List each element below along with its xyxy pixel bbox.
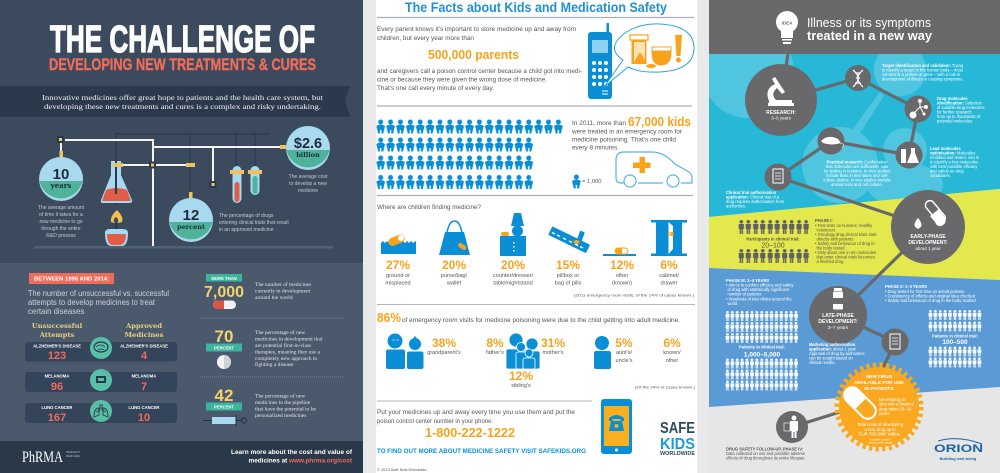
icon: flask <box>101 160 132 203</box>
text: lead molecules: to identify a few molecules <box>930 160 978 164</box>
stat: 10 years: years <box>50 181 71 190</box>
row: melanoma: MELANOMA <box>132 374 156 378</box>
text: 67,000 kids: 67,000 kids <box>628 114 691 129</box>
intro text: cine or because they were given the wrong dose of medicine. <box>377 76 547 84</box>
badge: new drug available: EUR 700–800* million. <box>859 432 901 436</box>
header title <box>807 15 933 43</box>
text: phase I: • Safety and behaviour of drug in <box>815 241 875 246</box>
text: target identification <box>882 63 964 82</box>
stats: parents and siblings: mother's <box>543 350 564 356</box>
icon: mobile phone and speech bubble <box>588 23 694 99</box>
stat: 70 percent: fighting a disease <box>255 361 294 368</box>
text: 67,000 kids: In 2011, more than <box>572 120 626 127</box>
text: phase I: the body tested <box>816 246 845 250</box>
stats: aunts, other: known/ <box>663 350 681 356</box>
icon: ground <box>381 233 416 254</box>
footer call to action: Learn more about the cost and value of <box>231 449 353 456</box>
row: lung cancer <box>25 400 177 424</box>
percentages: places: pillbox or <box>557 273 579 279</box>
text: lead molecules: and safety as drug <box>930 168 964 174</box>
percentages: places: table/nightstand <box>493 280 533 286</box>
stat: 7,000: around the world <box>255 295 293 301</box>
badge: new drug available: drug takes 10–15 <box>879 406 912 412</box>
title: THE CHALLENGE OF <box>50 19 315 61</box>
percentages: places: ground or <box>386 273 410 279</box>
row: alzheimer's <box>25 337 177 362</box>
copyright: © 2013 Safe Kids Worldwide <box>377 467 427 472</box>
stat: 7,000: The number of medicines <box>255 281 311 288</box>
percentages: places <box>385 258 679 286</box>
phase II patients pictogram: 100–500 <box>942 339 968 346</box>
header title: Illness or its symptoms <box>807 15 931 30</box>
icon: counter with lamp <box>500 213 526 256</box>
node: research: 3–5 years <box>771 116 792 120</box>
text: phase I: a finished drug <box>816 259 844 264</box>
column headings: Medicines <box>124 331 164 339</box>
stat: 10 years: R&D process <box>46 233 76 239</box>
text: target identification: commonly a protein or gene – with a role in <box>882 72 961 77</box>
percentages: places: 20% <box>442 258 466 272</box>
badge: new drug available: AVAILABLE FOR USE <box>854 380 904 386</box>
text: practical research: for testing in humans. In vitro studies <box>824 168 890 174</box>
percentages: places: cabinet/ <box>659 273 679 279</box>
text: phase III: • Hundreds of trial clinics around the <box>726 296 792 302</box>
text: phase I <box>815 218 877 264</box>
text: phase II: PHASE II: 1–3 YEARS <box>885 284 927 289</box>
intro text: children, but every year more than <box>377 35 474 42</box>
text: 67,000 kids <box>571 114 691 152</box>
text: marketing authorisation: application: about 1 year <box>809 346 857 352</box>
icon: purse <box>439 221 470 255</box>
icon: family <box>506 333 540 369</box>
text: drug safety follow-up: effects of drug throughout its entire lifespan. <box>726 456 806 460</box>
text: phase III <box>726 278 795 306</box>
node: late-phase development <box>809 286 867 344</box>
text: clinical trial authorisation: application: Clinical trial of a <box>726 194 780 200</box>
text: clinical trial authorisation: authorities. <box>726 204 746 208</box>
row: lung cancer: LUNG CANCER <box>42 405 72 410</box>
text: lead molecules: optimisation: Molecules <box>930 150 975 156</box>
percentages: places: (known) <box>612 280 632 286</box>
node: early-phase development <box>891 190 965 264</box>
logo: safe kids: KIDS <box>660 436 695 453</box>
badge: new drug available: Total costs of developing <box>857 422 904 427</box>
lab pipes diagram <box>57 134 286 247</box>
percentages: places: 12% <box>610 258 634 272</box>
panel: kids and medication safety <box>376 0 697 473</box>
comparison intro text: The number of unsuccessful vs. successful <box>28 289 169 298</box>
stat: 70 percent: completely new approach to <box>255 356 317 362</box>
stats: parents and siblings: 8% <box>486 336 504 350</box>
row: melanoma <box>25 369 177 393</box>
panel: challenge of developing treatments <box>0 0 363 473</box>
footer call to action <box>231 449 353 464</box>
column headings <box>32 322 164 339</box>
phase I participants pictogram: Participants in clinical trial: <box>746 236 800 242</box>
intro text: and caregivers call a poison control center because a child got into medi- <box>377 68 582 75</box>
stat: 2.6 billion <box>286 126 330 194</box>
node: marketing document <box>882 328 908 356</box>
text: drug molecules: Drug molecules <box>937 96 968 101</box>
stat: grandparents <box>427 336 461 356</box>
label: between 1998 and 2014 <box>29 273 114 284</box>
text: marketing authorisation: Approval of drug by authorities <box>809 351 865 356</box>
text: practical research: include tests in test tubes and cell- <box>826 173 889 178</box>
column headings: Unsuccessful <box>32 322 83 330</box>
text: phase II: • Safety and behaviour of drug in the body studied <box>885 298 976 303</box>
stat: 42 percent: that have the potential to be <box>255 406 316 412</box>
text: phase III: of drug with statistically significant <box>728 287 790 292</box>
text: marketing authorisation: can be sought based on <box>809 356 853 360</box>
label: between 1998 and 2014: BETWEEN 1998 AND 2014: <box>34 276 109 282</box>
logo: orion: ORION <box>934 443 983 455</box>
text: phase I: PHASE I: <box>815 218 833 223</box>
text: lead molecules: modified and tested. Aim is <box>930 155 979 160</box>
text: 67,000 kids: every 8 minutes. <box>572 144 619 152</box>
badge: new drug available: years. <box>879 411 890 416</box>
stat: 7,000: 7,000 <box>204 284 244 301</box>
call to action: Put your medicines up and away every time you use them and put the <box>377 409 575 416</box>
row: melanoma: MELANOMA <box>45 374 69 378</box>
stat: 12 percent: The percentage of drugs <box>219 213 274 219</box>
text: clinical trial authorisation <box>726 190 785 208</box>
headline: 86%: 86% <box>377 310 401 325</box>
icon: ambulance van <box>616 152 692 187</box>
text: phase I: • Only about one in ten molecules <box>815 250 876 255</box>
percentages: places: purse/bag/ <box>441 273 468 279</box>
badge: new drug available: *Includes costs of <box>869 438 891 442</box>
stat: 10 years: new medicine to go <box>39 219 83 225</box>
background bands <box>709 0 1000 407</box>
call to action: poison control center number in your phone: <box>377 418 493 425</box>
row: lung cancer: 167 <box>48 412 66 424</box>
stat: 70 percent: therapies, meaning they use a <box>255 349 320 355</box>
percentages: places: drawer <box>660 280 678 286</box>
stat: grandparents: 38% <box>432 336 456 350</box>
icon: aunt or uncle <box>594 336 611 369</box>
stat: 7,000: MORE THAN <box>211 276 237 281</box>
note: (Of the 24% of cases known.) <box>635 384 696 390</box>
text: lead molecules: Lead molecules <box>930 146 961 151</box>
text: phase III: PHASE III: 2–4 YEARS <box>726 278 769 283</box>
text: phase I: • First tests on humans; healthy <box>815 223 873 228</box>
stat: 42 percent <box>203 386 316 426</box>
node: lab flasks <box>896 142 922 168</box>
text: phase I: directly with patients <box>816 236 853 242</box>
headline: 86% <box>377 310 680 325</box>
stat: 70 percent: PERCENT <box>214 345 234 350</box>
stats: aunts, other: aunt's/ <box>616 350 632 356</box>
stats: aunts, other: 5% <box>615 336 633 350</box>
node: early-phase development: EARLY-PHASE <box>910 234 946 240</box>
badge: new drug available: NEW DRUG <box>866 374 893 380</box>
stat: 12 percent: entering clinical trials that result <box>219 220 289 226</box>
node: follow-up <box>776 411 808 443</box>
stat: 2.6 billion: billion <box>296 151 320 159</box>
text: 67,000 kids: medicine poisoning. That's one child <box>572 136 677 144</box>
phase III patients pictogram: Patients in clinical trial: <box>739 344 785 350</box>
text: drug molecules: identification: Selection <box>937 100 983 106</box>
text: 67,000 kids: were treated in an emergency room for <box>571 128 682 136</box>
row: alzheimer's: ALZHEIMER'S DISEASE <box>120 344 168 348</box>
logo: safe kids: WORLDWIDE <box>660 451 696 457</box>
pictogram: kids treated <box>376 120 563 189</box>
stats: parents and siblings: 12% <box>509 369 533 383</box>
stat: 10 years: through the entire <box>41 226 81 232</box>
stat: 12 percent <box>169 198 289 242</box>
text: phase II: • Consistency of effects and original idea checked <box>885 294 976 298</box>
phase III patients pictogram <box>725 311 798 390</box>
stat: 2.6 billion: to develop a new <box>289 181 327 187</box>
node: late-phase development: LATE-PHASE <box>822 313 854 319</box>
phase I participants pictogram: 20–100 <box>761 242 785 250</box>
stats: aunts, other: other <box>666 358 678 364</box>
icon: smartphone <box>601 399 632 454</box>
text: marketing authorisation: clinical results. <box>809 360 836 365</box>
stat: 42 percent: 42 <box>215 386 233 405</box>
text: clinical trial authorisation: Clinical trial authorisation <box>726 190 777 195</box>
percentages: places: other <box>616 273 629 279</box>
text: clinical trial authorisation: drug requires authorisation from <box>726 199 785 204</box>
stat: 10 years: 10 <box>53 166 69 183</box>
stat: 12 percent: 12 <box>183 207 199 224</box>
text: phase III: number of patients <box>728 292 761 296</box>
logo: PhRMA: MEDICINES <box>66 455 80 458</box>
stats: parents and siblings: 31% <box>541 336 565 350</box>
icon: cabinet <box>651 220 687 256</box>
percentages: places: 27% <box>386 258 410 272</box>
text: phase III: world <box>728 301 738 306</box>
logo: safe kids <box>660 420 696 457</box>
percentages: places: 6% <box>660 258 678 272</box>
icon: test tubes <box>230 166 262 203</box>
stats: parents and siblings: sibling's <box>511 383 531 389</box>
text: marketing authorisation: Marketing authorisation <box>809 342 856 347</box>
node: molecule <box>904 96 932 122</box>
comparison intro text: certain diseases <box>28 307 84 316</box>
percentages: places: counter/dresser/ <box>493 273 534 279</box>
subtitle: DEVELOPING NEW TREATMENTS & CURES <box>49 56 316 74</box>
text: phase I: • Oncology drug clinical trials start <box>815 232 877 237</box>
badge: new drug available: Developing an <box>879 397 906 402</box>
stat: 2.6 billion: The average cost <box>289 174 328 180</box>
text: drug molecules: potential molecules. <box>937 118 973 124</box>
stats: parents and siblings: father's <box>486 350 504 356</box>
legend: one icon = 1,000: = 1,000 <box>582 179 602 185</box>
stat: 70 percent: medicines in development that <box>255 336 323 342</box>
logo: PhRMA: PhRMA <box>22 449 64 466</box>
text: drug molecules: of suitable drug molecules <box>937 105 985 110</box>
node: rat <box>818 128 844 154</box>
text: practical research: culture dishes, in vivo studies include <box>823 178 891 182</box>
intro banner: Innovative medicines offer great hope to patients and the health care system, but <box>42 93 324 102</box>
text: phase III: • Aim is to confirm efficacy and safety <box>726 282 795 288</box>
badge: new drug available: idea into a finished <box>879 402 915 406</box>
stat: 2.6 billion: medicine <box>298 188 318 194</box>
stat: 70 percent: are potential first-in-class <box>255 342 311 349</box>
stats: parents and siblings <box>486 336 565 389</box>
stats: aunts, other <box>615 336 681 364</box>
text: phase II <box>885 284 976 303</box>
stat: 70 percent <box>206 327 323 369</box>
text: lead molecules <box>930 146 979 178</box>
text: lead molecules: with best possible efficacy <box>930 164 978 169</box>
intro banner <box>0 86 350 117</box>
row: lung cancer: LUNG CANCER <box>129 405 159 410</box>
text: practical research: animal tests and cell culture. <box>831 182 883 187</box>
stat: 12 percent: percent <box>177 223 205 231</box>
logo: orion <box>934 439 983 461</box>
stat: 42 percent: PERCENT <box>214 404 234 409</box>
text: practical research: Practical research: Confirmation <box>826 160 888 164</box>
panel: illness treated in a new way <box>702 0 1000 473</box>
percentages: places: 20% <box>501 258 525 272</box>
node: late-phase development: DEVELOPMENT: <box>818 319 858 325</box>
divider lines <box>200 318 344 377</box>
row: melanoma: 96 <box>51 381 63 393</box>
header: idea bulb: IDEA <box>782 20 793 26</box>
text: practical research: that molecules are sufficiently safe <box>826 164 889 169</box>
text: drug safety follow-up: Data collected on use and possible adverse <box>726 451 806 456</box>
intro text <box>377 26 582 92</box>
text: phase I: that enter clinical trials becomes <box>816 254 875 260</box>
node: clinical document <box>764 164 792 190</box>
phase II patients pictogram: Patients in clinical trial: <box>932 334 978 338</box>
node: early-phase development: about 1 year <box>915 246 941 251</box>
stat: 70 percent: The percentage of new <box>255 329 305 336</box>
badge: new drug available <box>837 365 921 449</box>
header title: treated in a new way <box>807 28 933 43</box>
intro text: Every parent knows it's important to store medicine up and away from <box>377 26 576 33</box>
column headings: Approved <box>125 322 162 330</box>
intro text: That's one call every minute of every day. <box>377 85 494 92</box>
row: melanoma: 7 <box>141 381 147 393</box>
badge: new drug available: IN PATIENTS <box>864 386 894 392</box>
footer call to action: medicines at www.phrma.org/cost <box>249 458 353 464</box>
text: drug safety follow-up <box>726 446 806 460</box>
intro banner: developing these new treatments and cures is a complex and risky undertaking. <box>44 102 321 111</box>
node: early-phase development: DEVELOPMENT: <box>908 240 948 246</box>
text: target identification: Target identification and validation: Trying <box>882 63 964 68</box>
logo: safe kids: SAFE <box>660 420 695 437</box>
percentages: places: wallet <box>446 280 462 286</box>
row: alzheimer's: 4 <box>141 350 148 362</box>
intro text: 500,000 parents <box>428 48 519 62</box>
comparison intro text <box>28 289 169 316</box>
text: target identification: development of illness or causing symptoms. <box>882 76 963 82</box>
phase I participants pictogram <box>738 220 811 263</box>
node: research <box>745 64 817 136</box>
text: drug safety follow-up: DRUG SAFETY FOLLOW-UP, PHASE IV: <box>726 446 803 452</box>
stat: 2.6 billion: $2.6 <box>294 136 322 152</box>
node: research: RESEARCH: <box>766 110 796 116</box>
stat: grandparents: grandparent's <box>427 350 461 356</box>
phase III patients pictogram: 1,000–5,000 <box>744 352 780 358</box>
headline: 86%: of emergency room visits for medicine poisoning were due to the child getting into adult medicine. <box>402 317 680 324</box>
shelf <box>34 246 333 248</box>
text: drug molecules: from up to thousands of <box>937 114 981 119</box>
row: alzheimer's: 123 <box>48 350 66 362</box>
legend: one icon = 1,000 <box>572 174 602 188</box>
percentages: places: misplaced <box>385 280 411 286</box>
text: drug molecules <box>937 96 985 124</box>
header: idea bulb <box>776 11 798 44</box>
column headings: Attempts <box>39 331 75 339</box>
badge: new drug available: unsuccessful drugs <box>868 440 893 444</box>
text: practical research <box>823 160 891 187</box>
logo: PhRMA: RESEARCH <box>66 451 80 454</box>
badge: new drug available: a new drug up to <box>864 427 896 432</box>
logo: orion: Building well-being <box>940 456 977 461</box>
text: drug molecules: for further research <box>937 110 973 114</box>
text: phase II: • Drug tested for first time on actual patients <box>885 289 964 294</box>
stat: 70 percent: 70 <box>215 327 233 346</box>
text: marketing authorisation <box>809 342 865 365</box>
node: dna <box>845 65 871 91</box>
icon: other <box>603 248 636 256</box>
stat: 12 percent: in an approved medicine <box>219 227 274 233</box>
percentages: places: bag of pills <box>555 280 582 286</box>
icon: grandparents <box>386 334 424 369</box>
stats: aunts, other: uncle's <box>616 358 633 364</box>
stat: 7,000: currently in development <box>255 288 311 294</box>
icon: burner <box>105 210 128 246</box>
stat: 42 percent: The percentage of new <box>255 392 305 400</box>
text: lead molecules: candidates. <box>930 173 951 178</box>
icon: pillbox <box>548 226 590 253</box>
phase II patients pictogram <box>928 310 982 368</box>
text: target identification: to identify a target in the human body – most <box>882 68 964 72</box>
stat: 10 years: The average amount <box>38 205 85 211</box>
stats: aunts, other: 6% <box>663 336 681 350</box>
node: late-phase development: 3–7 years <box>828 325 849 330</box>
note: (2011 emergency room visits, of the 14% of cases known.) <box>574 292 695 298</box>
call to action <box>377 409 586 455</box>
network connectors <box>778 54 928 427</box>
percentages: places: 15% <box>556 258 580 272</box>
call to action: TO FIND OUT MORE ABOUT MEDICINE SAFETY VISIT SAFEKIDS.ORG <box>377 448 586 455</box>
stat: 42 percent: medicines in the pipeline <box>255 400 311 406</box>
text: phase I: volunteers <box>816 228 835 232</box>
heading: where finding medicine: Where are children finding medicine? <box>377 204 481 211</box>
row: lung cancer: 10 <box>138 412 150 424</box>
stat: 7,000 <box>204 274 311 309</box>
stat: 42 percent: personalized medicines <box>255 413 306 419</box>
comparison intro text: attempts to develop medicines to treat <box>28 298 156 307</box>
call to action: 1-800-222-1222 <box>425 425 515 440</box>
row: alzheimer's: ALZHEIMER'S DISEASE <box>33 344 81 348</box>
stat: 10 years <box>38 157 85 239</box>
stat: 10 years: of time it takes for a <box>39 212 83 218</box>
